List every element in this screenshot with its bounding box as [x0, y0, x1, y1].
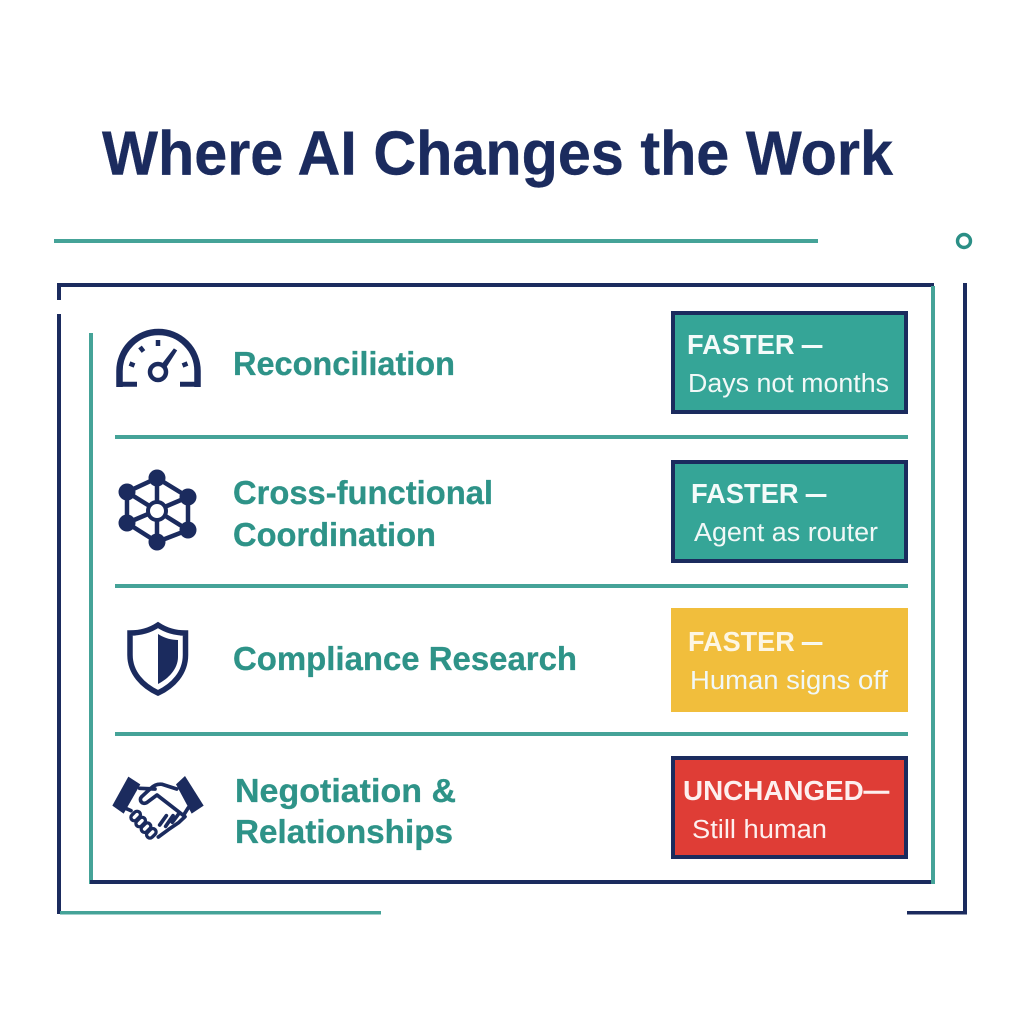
status badge: still human: —	[864, 777, 889, 805]
status badge: agent as router: Agent as router	[694, 519, 879, 547]
icon: speedometer gauge	[117, 332, 200, 387]
title rule with circle ornament	[54, 234, 970, 248]
row 1: reconciliation	[117, 313, 906, 412]
label: Negotiation & Relationships	[235, 772, 456, 850]
status badge: agent as router	[673, 462, 906, 561]
status badge: days not months: —	[802, 335, 822, 357]
row 2: cross-functional coordination	[118, 462, 906, 561]
status badge: human signs off	[671, 608, 908, 712]
status badge: agent as router: —	[806, 484, 826, 506]
status badge: human signs off: —	[802, 632, 822, 654]
title: Where AI Changes the Work	[102, 120, 893, 188]
label: Compliance Research: Compliance Research	[233, 640, 577, 677]
icon: handshake	[112, 776, 204, 839]
status badge: days not months: Days not months	[688, 370, 889, 398]
label: Cross-functional Coordination: Cross-functional	[233, 474, 493, 511]
status badge: days not months: FASTER	[687, 329, 795, 360]
row 4: negotiation and relationships	[112, 758, 906, 857]
icon: hexagonal network	[118, 470, 196, 550]
row 3: compliance research	[130, 608, 908, 712]
status badge: human signs off: Human signs off	[690, 667, 889, 695]
row dividers	[115, 435, 908, 736]
status badge: human signs off: FASTER	[688, 626, 796, 657]
frame: outer and inner border lines	[57, 283, 967, 914]
label: Cross-functional Coordination	[233, 474, 493, 553]
icon: shield	[130, 625, 186, 693]
label: Reconciliation: Reconciliation	[233, 345, 455, 382]
label: Cross-functional Coordination: Coordination	[233, 516, 436, 553]
label: Negotiation & Relationships: Negotiation &	[235, 772, 456, 809]
status badge: still human: UNCHANGED	[683, 775, 862, 806]
status badge: still human	[673, 758, 906, 857]
status badge: agent as router: FASTER	[691, 478, 799, 509]
label: Negotiation & Relationships: Relationships	[235, 813, 453, 850]
status badge: still human: Still human	[692, 816, 827, 844]
status badge: days not months	[673, 313, 906, 412]
